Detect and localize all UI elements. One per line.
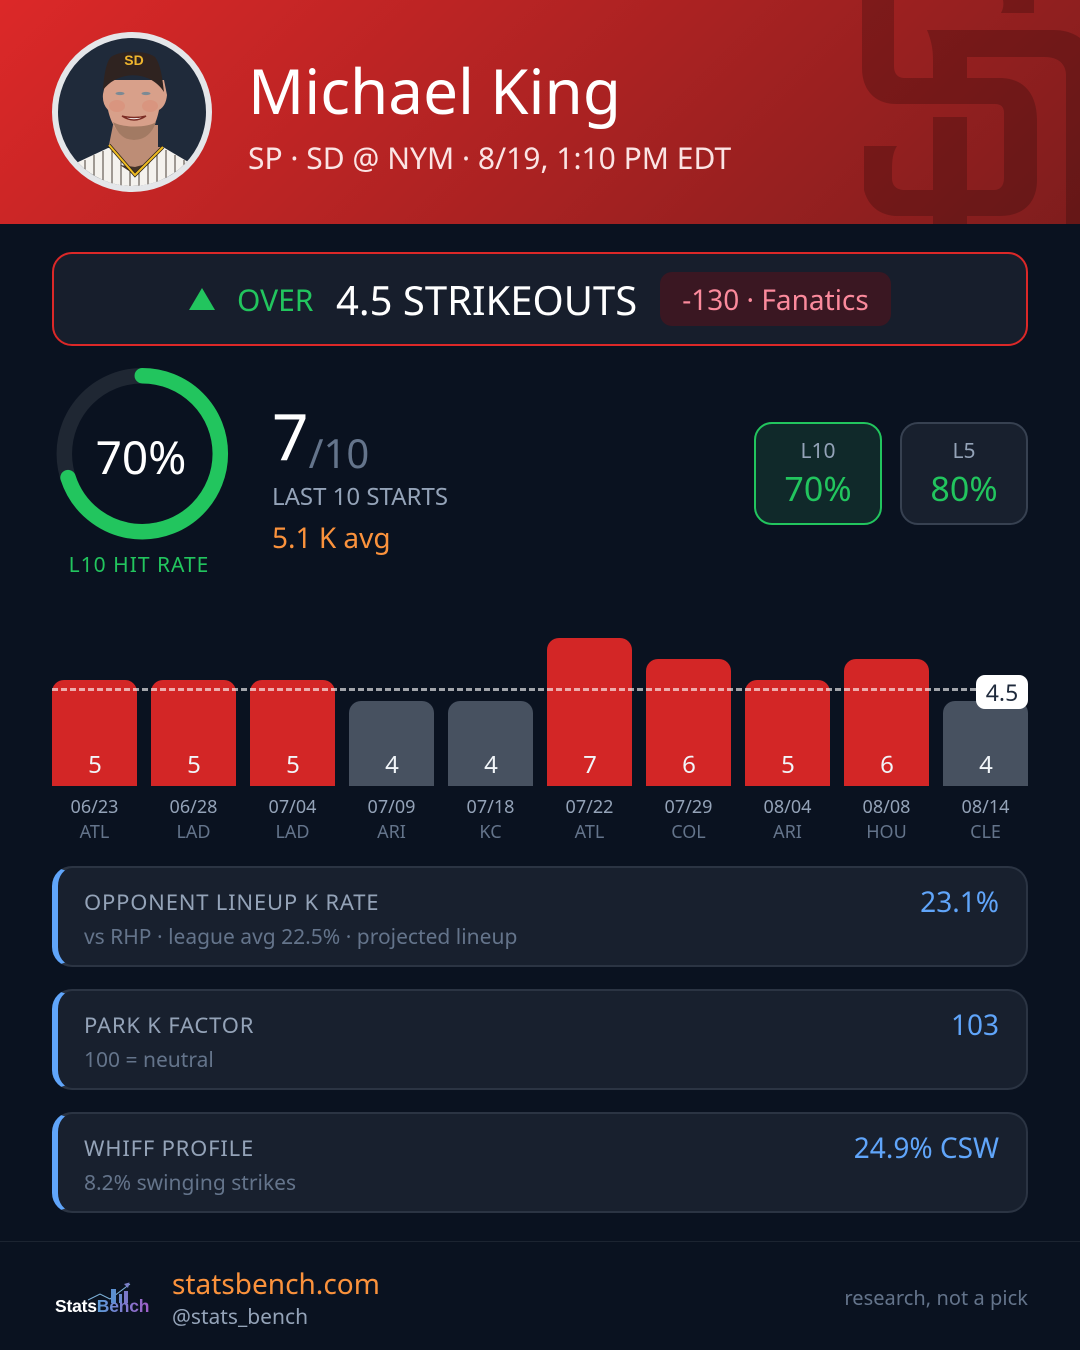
bar chart: ATL	[80, 820, 109, 844]
bar chart: 06/28	[170, 795, 217, 819]
bar chart: 07/22	[566, 795, 613, 819]
social handle: @stats_bench	[172, 1303, 308, 1331]
bar chart: CLE	[970, 820, 1001, 844]
stat card: opponent lineup k rate: OPPONENT LINEUP K RATE	[84, 887, 379, 917]
header banner	[0, 0, 1080, 224]
bar chart: 07/29	[665, 795, 712, 819]
L5 pill: L5	[952, 437, 976, 465]
stat card: opponent lineup k rate: vs RHP · league avg 22.5% · projected lineup	[84, 923, 517, 951]
L10 pill: 70%	[784, 465, 852, 511]
stat card: park k factor: PARK K FACTOR	[84, 1010, 254, 1040]
bar chart: COL	[671, 820, 706, 844]
hit count: 7/10	[272, 392, 369, 480]
cap	[103, 52, 164, 92]
cap logo: SD	[124, 52, 144, 68]
bar chart: LAD	[176, 820, 211, 844]
icon: StatsBench logo	[55, 1282, 149, 1316]
bar chart: 07/09	[368, 795, 415, 819]
subtitle: game info: SP · SD @ NYM · 8/19, 1:10 PM EDT	[248, 137, 731, 178]
bar chart: 5	[88, 748, 102, 781]
bar chart: 5	[187, 748, 201, 781]
bar chart: 08/14	[962, 795, 1009, 819]
bar chart: 07/04	[269, 795, 316, 819]
line label: 4.5 STRIKEOUTS	[336, 272, 637, 327]
over label: OVER	[237, 279, 313, 320]
stat card: park k factor: 100 = neutral	[84, 1046, 214, 1074]
face	[103, 80, 167, 140]
odds badge: -130 · Fanatics	[682, 281, 869, 319]
bar chart: ARI	[377, 820, 406, 844]
bar chart: 5	[286, 748, 300, 781]
bar chart: HOU	[866, 820, 907, 844]
bar chart: 4	[385, 748, 399, 781]
bar chart: 6	[880, 748, 894, 781]
bar chart: 4	[979, 748, 993, 781]
neck	[109, 125, 160, 167]
bar chart: 06/23	[71, 795, 118, 819]
bar chart: 4	[484, 748, 498, 781]
L5 pill	[900, 422, 1028, 525]
bar chart: 08/04	[764, 795, 811, 819]
ring caption: L10 HIT RATE	[69, 551, 209, 579]
icon: team logo watermark	[862, 0, 1080, 224]
hit rate ring	[56, 368, 228, 540]
bar chart: ATL	[575, 820, 604, 844]
stat card: whiff profile: 24.9% CSW	[854, 1129, 999, 1167]
bar chart: ARI	[773, 820, 802, 844]
stat card: whiff profile: WHIFF PROFILE	[84, 1133, 254, 1163]
stat card: opponent lineup k rate: 23.1%	[920, 883, 999, 921]
icon: up triangle	[189, 288, 215, 310]
stat card: park k factor	[52, 989, 1028, 1090]
ring percentage: 70%	[96, 426, 186, 488]
jersey	[78, 147, 187, 186]
player headshot avatar	[52, 32, 212, 192]
average strikeouts: 5.1 K avg	[272, 519, 391, 557]
bar chart: LAD	[275, 820, 310, 844]
L5 pill: 80%	[930, 465, 998, 511]
prop line panel	[52, 252, 1028, 346]
bar chart: 4.5	[986, 676, 1018, 708]
L10 pill	[754, 422, 882, 525]
site url: statsbench.com	[172, 1265, 380, 1303]
footer	[0, 1241, 1080, 1350]
title: player name: Michael King	[248, 49, 621, 133]
bar chart: 6	[682, 748, 696, 781]
L10 pill: L10	[800, 437, 836, 465]
bar chart: 5	[781, 748, 795, 781]
stat card: whiff profile	[52, 1112, 1028, 1213]
bar chart: 08/08	[863, 795, 910, 819]
bar chart: KC	[479, 820, 502, 844]
stat card: park k factor: 103	[951, 1006, 999, 1044]
stat card: opponent lineup k rate	[52, 866, 1028, 967]
bar chart: 07/18	[467, 795, 514, 819]
disclaimer: research, not a pick	[844, 1284, 1028, 1311]
icon: StatsBench logo: StatsBench	[55, 1296, 149, 1316]
last 10 starts label: LAST 10 STARTS	[272, 480, 448, 513]
bar chart: 7	[583, 748, 597, 781]
stat card: whiff profile: 8.2% swinging strikes	[84, 1169, 296, 1197]
odds badge	[660, 272, 891, 326]
